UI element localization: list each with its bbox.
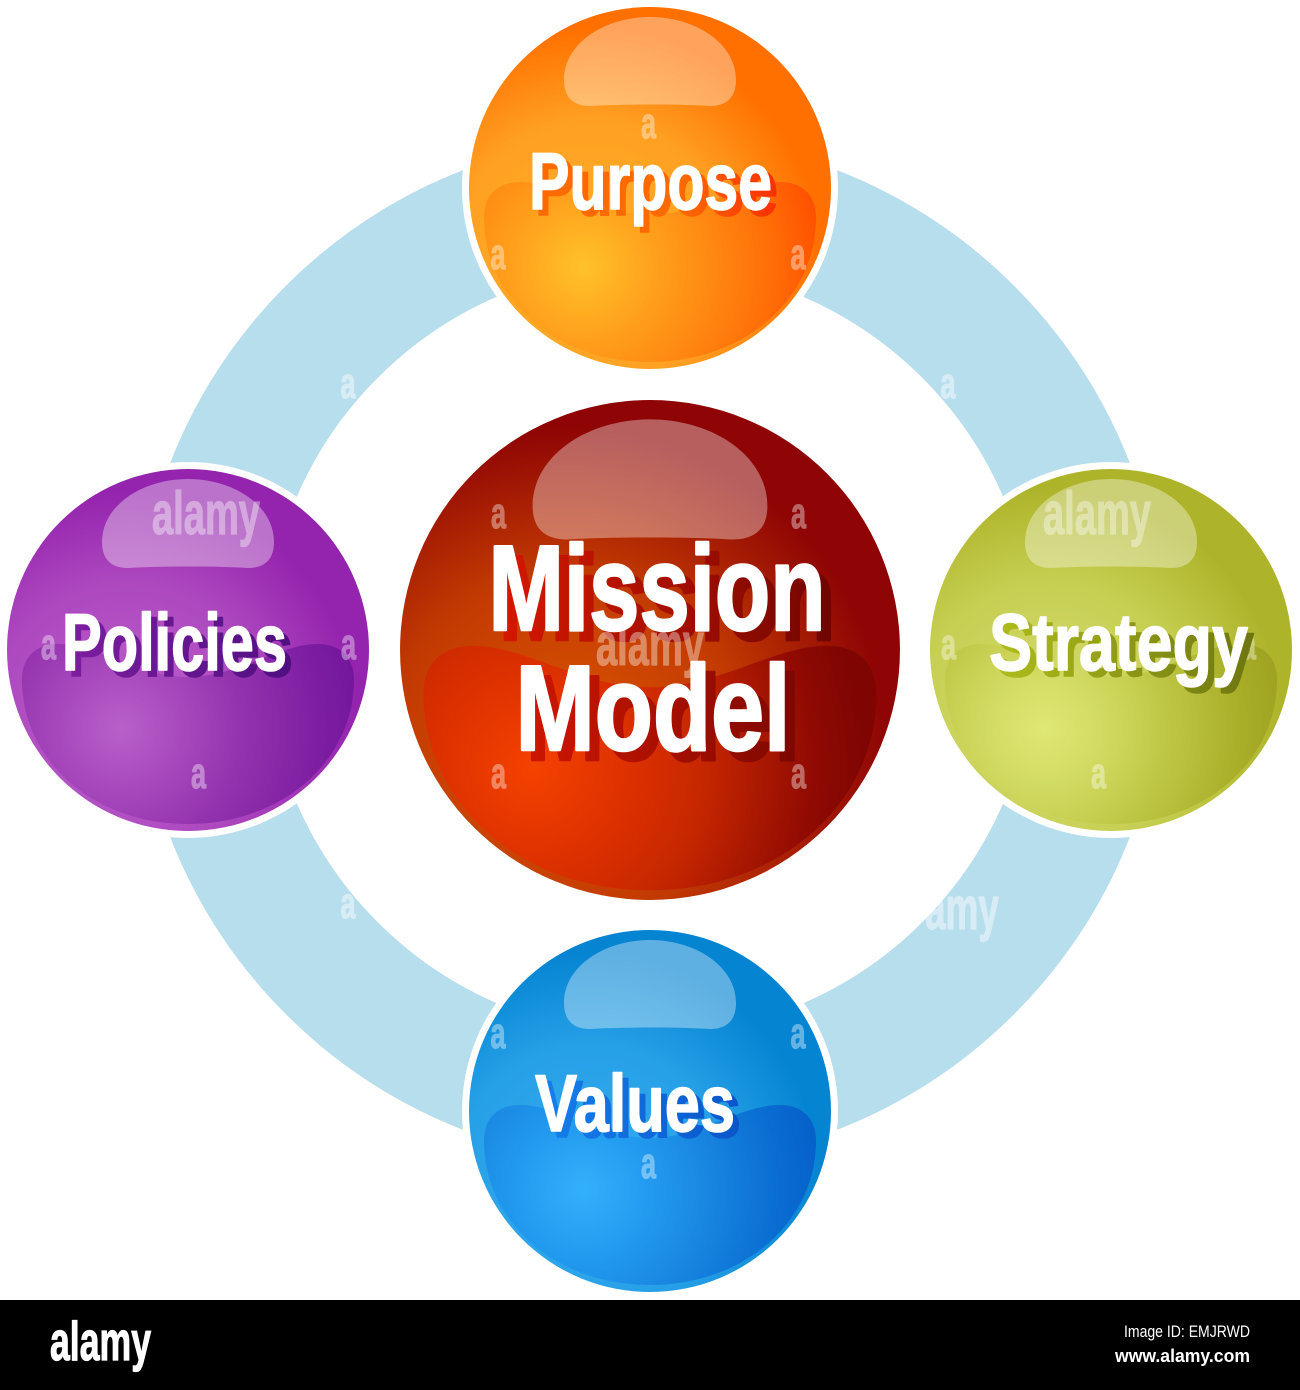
- watermarks: [491, 489, 806, 798]
- label: Mission Model: alamy: [596, 611, 704, 678]
- watermarks: a: [41, 620, 56, 669]
- sphere: Purpose: [462, 0, 838, 376]
- watermarks: a: [790, 230, 806, 279]
- watermarks: [941, 480, 1256, 798]
- label: Values: Values: [535, 1059, 735, 1149]
- sphere: Policies: [0, 462, 376, 838]
- watermarks: a: [641, 99, 656, 148]
- sphere: Mission Model (centre): [400, 400, 900, 900]
- label: Mission Model: [488, 520, 836, 786]
- sphere: Strategy: [923, 462, 1299, 838]
- label: Mission Model: Mission: [498, 530, 836, 666]
- label: Mission Model: Model: [516, 640, 790, 776]
- ring watermarks: [340, 359, 999, 942]
- image id: Image ID: EMJRWD: [1124, 1322, 1250, 1341]
- website: www.alamy.com: [1114, 1345, 1250, 1366]
- watermarks: [41, 480, 356, 798]
- watermarks: a: [941, 620, 956, 669]
- connecting ring: [200, 200, 1100, 1100]
- label: Purpose: Purpose: [535, 143, 778, 233]
- label: Policies: Policies: [62, 598, 287, 688]
- footer logo: alamy: [50, 1310, 151, 1372]
- watermarks: a: [490, 1009, 506, 1058]
- label: Mission Model: Model: [526, 650, 800, 786]
- ring watermarks: a: [340, 879, 356, 928]
- ring watermarks: amy: [925, 875, 999, 942]
- watermarks: a: [490, 230, 506, 279]
- watermarks: a: [491, 489, 506, 538]
- label: Values: Values: [541, 1065, 741, 1155]
- watermarks: a: [1241, 620, 1256, 669]
- sphere: Values: [462, 923, 838, 1299]
- watermarks: a: [641, 1139, 656, 1188]
- watermarks: [490, 99, 806, 279]
- label: Purpose: Purpose: [529, 137, 772, 227]
- watermarks: a: [791, 489, 806, 538]
- watermarks: a: [191, 749, 206, 798]
- label: Mission Model: Mission: [488, 520, 826, 656]
- watermarks: a: [790, 1009, 806, 1058]
- watermarks: alamy: [1043, 480, 1151, 547]
- ring watermarks: a: [940, 359, 956, 408]
- watermarks: a: [491, 749, 506, 798]
- watermarks: a: [1091, 749, 1106, 798]
- watermarks: a: [791, 749, 806, 798]
- watermarks: alamy: [152, 480, 260, 547]
- watermarks: [490, 1009, 806, 1188]
- ring watermarks: a: [340, 359, 356, 408]
- watermarks: a: [341, 620, 356, 669]
- label: Policies: Policies: [68, 604, 293, 694]
- footer bar: [0, 1300, 1300, 1390]
